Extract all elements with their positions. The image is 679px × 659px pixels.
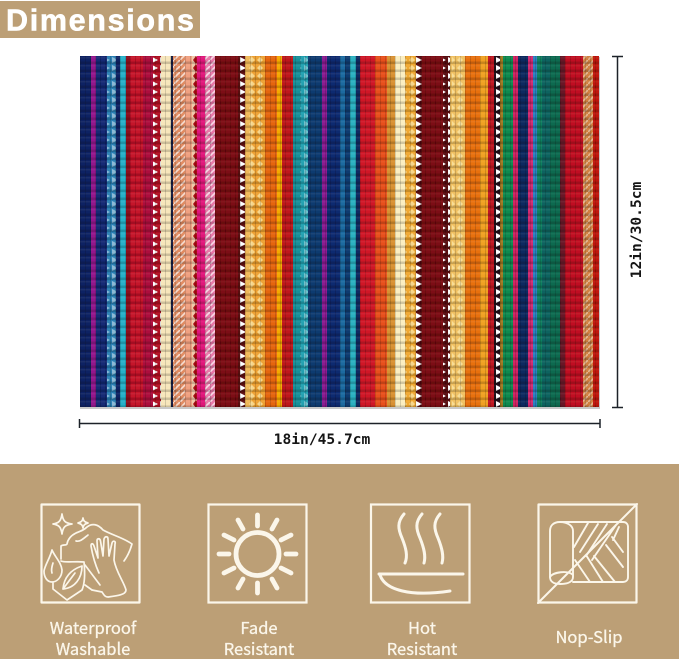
width label: 18in/45.7cm: [274, 431, 371, 448]
feature panel background: [0, 464, 679, 659]
placemat: serape stripes: [80, 56, 600, 409]
title: Dimensions: Dimensions: [6, 4, 194, 38]
label: Fade Resistant: Fade: [240, 615, 278, 639]
label: Waterproof Washable: Waterproof: [50, 615, 137, 639]
icon: hot resistant plate and steam: [371, 504, 470, 602]
label: Nop-Slip: Nop-Slip: [556, 624, 622, 648]
height dimension line: [612, 56, 623, 408]
height label: 12in/30.5cm: [628, 181, 645, 278]
icon: waterproof washable: [42, 504, 140, 602]
icon: fade resistant sun: [208, 504, 306, 602]
icon: non-slip rolled mat: [538, 504, 637, 603]
width dimension line: [80, 419, 600, 428]
label: Hot Resistant: Hot: [408, 615, 436, 639]
